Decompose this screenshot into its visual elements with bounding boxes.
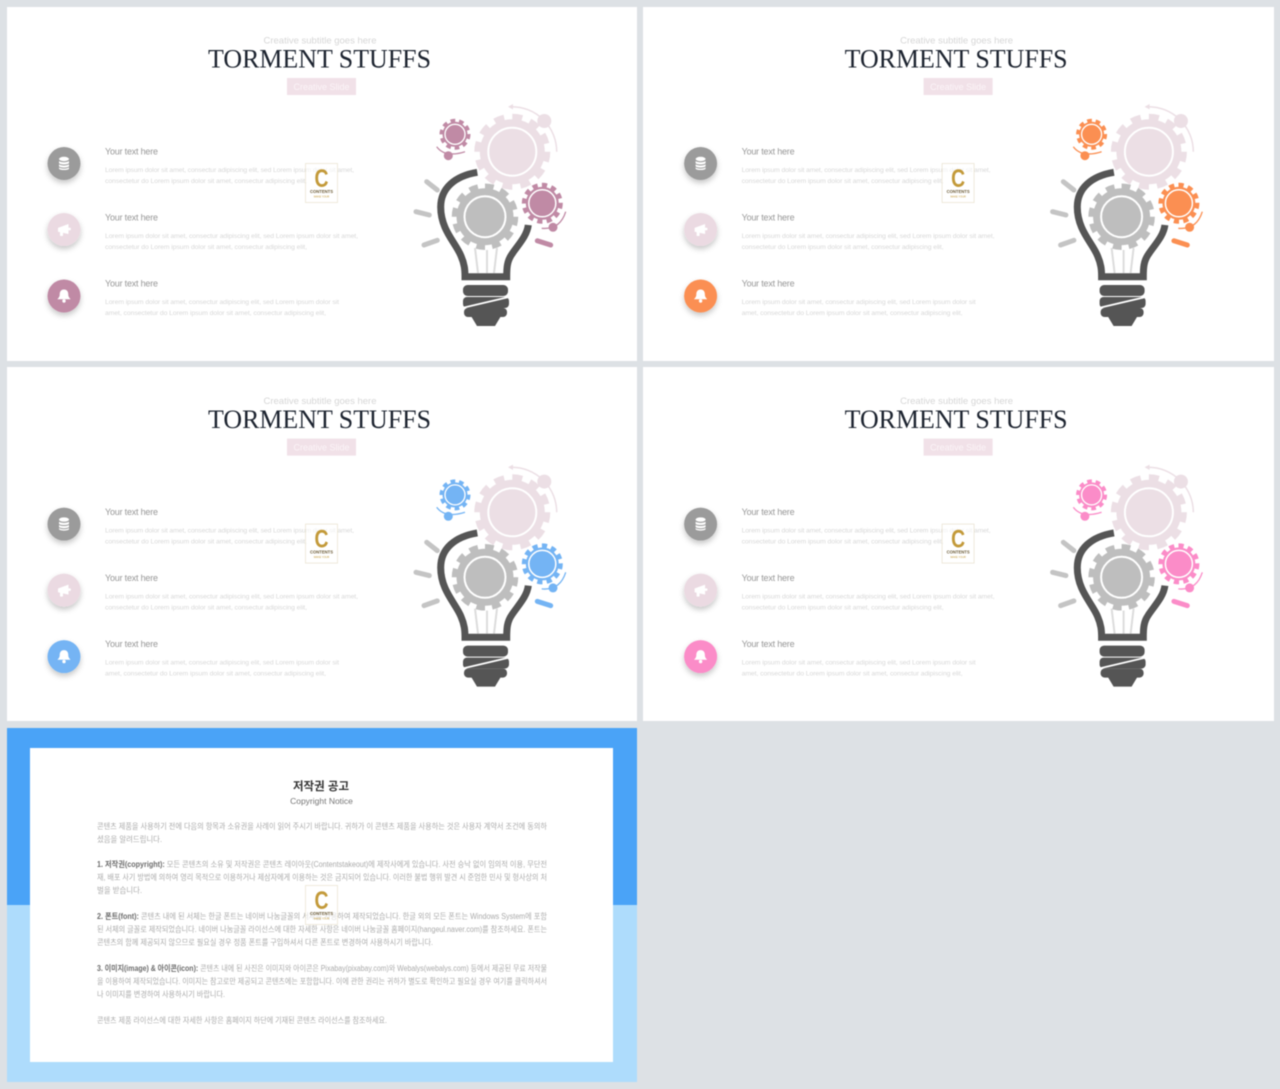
light blue lower band bbox=[7, 905, 637, 1082]
badge bbox=[287, 439, 356, 456]
title: TORMENT STUFFS bbox=[208, 44, 431, 74]
subtitle: Creative subtitle goes here bbox=[263, 396, 377, 407]
panel bbox=[643, 367, 1274, 721]
title: TORMENT STUFFS bbox=[845, 44, 1068, 74]
badge: Creative Slide bbox=[293, 82, 350, 92]
intro paragraph: 콘텐츠 제품을 사용하기 전에 다음의 항목과 소유권을 사례이 읽어 주시기 바랍니다. 귀하가 이 콘텐츠 제품을 사용하는 것은 사용자 계약서 조건에 동의하 bbox=[97, 821, 548, 831]
watermark bbox=[942, 164, 974, 202]
item 2: consectetur do Lorem ipsum dolor sit amet, consectur adipiscing elit, bbox=[742, 244, 944, 251]
subtitle: Creative subtitle goes here bbox=[900, 36, 1013, 46]
watermark: CONTENTS bbox=[947, 189, 970, 194]
item 1: Your text here bbox=[742, 146, 795, 156]
watermark: CONTENTS bbox=[310, 550, 333, 555]
badge: Creative Slide bbox=[930, 443, 986, 453]
item 3: Your text here bbox=[742, 278, 795, 288]
item 3 bbox=[684, 278, 976, 317]
item 1: consectetur do Lorem ipsum dolor sit amet, consectur adipiscing elit, bbox=[105, 178, 307, 185]
watermark: CONTENTS bbox=[310, 911, 333, 916]
item 1: Lorem ipsum dolor sit amet, consectur adipiscing elit, sed Lorem ipsum dolor sit amet, bbox=[742, 528, 991, 535]
slide 4: pink bbox=[643, 367, 1274, 721]
panel bbox=[7, 7, 637, 361]
item 3: Lorem ipsum dolor sit amet, consectur adipiscing elit, sed Lorem ipsum dolor sit bbox=[742, 660, 976, 667]
watermark: C bbox=[314, 526, 328, 554]
item 2: consectetur do Lorem ipsum dolor sit amet, consectur adipiscing elit, bbox=[742, 605, 944, 612]
item 1 bbox=[48, 507, 354, 546]
item 3: amet, consectetur do Lorem ipsum dolor sit amet, consectur adipiscing elit, bbox=[742, 671, 963, 678]
item 3: Lorem ipsum dolor sit amet, consectur adipiscing elit, sed Lorem ipsum dolor sit bbox=[742, 299, 976, 306]
item 1: Your text here bbox=[105, 507, 158, 517]
watermark: C bbox=[951, 526, 965, 554]
item 2: consectetur do Lorem ipsum dolor sit amet, consectur adipiscing elit, bbox=[105, 244, 307, 251]
item 3 bbox=[48, 639, 339, 678]
section 1 bbox=[97, 859, 547, 895]
item 2: Lorem ipsum dolor sit amet, consectur adipiscing elit, sed Lorem ipsum dolor sit amet, bbox=[105, 233, 358, 240]
title: TORMENT STUFFS bbox=[845, 405, 1068, 434]
bulb illustration bbox=[1053, 465, 1193, 687]
item 3 bbox=[48, 278, 339, 317]
watermark: MAKE YOUR bbox=[950, 555, 966, 559]
section 1: 벌을 받습니다. bbox=[97, 885, 142, 895]
item 3 bbox=[684, 639, 976, 678]
item 1 bbox=[684, 146, 991, 185]
item 1: consectetur do Lorem ipsum dolor sit amet, consectur adipiscing elit, bbox=[742, 178, 944, 185]
bulb illustration bbox=[416, 104, 557, 326]
watermark: C bbox=[314, 165, 328, 193]
subtitle: Creative subtitle goes here bbox=[263, 36, 377, 46]
bulb illustration bbox=[416, 465, 557, 687]
item 3: Your text here bbox=[105, 639, 158, 649]
item 3: Lorem ipsum dolor sit amet, consectur adipiscing elit, sed Lorem ipsum dolor sit bbox=[105, 299, 339, 306]
badge bbox=[924, 78, 993, 95]
accent gears bbox=[437, 481, 566, 606]
intro paragraph: 셨음을 알려드립니다. bbox=[97, 834, 162, 844]
slide 3: blue bbox=[7, 367, 637, 721]
notice subheading: Copyright Notice bbox=[290, 796, 353, 806]
title: TORMENT STUFFS bbox=[208, 405, 431, 434]
subtitle: Creative subtitle goes here bbox=[900, 396, 1013, 407]
panel bbox=[643, 7, 1274, 361]
bulb illustration bbox=[1053, 104, 1193, 326]
item 1: Your text here bbox=[742, 507, 795, 517]
item 2 bbox=[684, 212, 995, 251]
item 2 bbox=[684, 573, 995, 612]
item 2: Your text here bbox=[742, 212, 795, 222]
watermark: C bbox=[314, 887, 328, 915]
section 3: 을 이용하여 제작되었습니다. 이미지는 참고로만 제공되고 콘텐츠에는 포함합니다. 이에 관한 권리는 귀하가 별도로 확인하고 필요실 경우 여기를 클릭하셔서 bbox=[97, 976, 547, 986]
watermark: MAKE YOUR bbox=[314, 916, 329, 920]
accent gears bbox=[1073, 121, 1202, 245]
item 2: Your text here bbox=[105, 573, 158, 583]
watermark bbox=[306, 164, 338, 202]
section 3: 3. 이미지(image) & 아이콘(icon): 콘텐츠 내에 된 사진은 이미지와 아이콘은 Pixabay(pixabay.com)와 Webalys(webalys.com) 등에서 제공된 무료 저작물 bbox=[97, 963, 547, 973]
badge: Creative Slide bbox=[930, 82, 986, 92]
item 1: consectetur do Lorem ipsum dolor sit amet, consectur adipiscing elit, bbox=[742, 539, 944, 546]
item 3: amet, consectetur do Lorem ipsum dolor sit amet, consectur adipiscing elit, bbox=[742, 310, 963, 317]
item 3: Lorem ipsum dolor sit amet, consectur adipiscing elit, sed Lorem ipsum dolor sit bbox=[105, 660, 339, 667]
watermark bbox=[306, 524, 338, 563]
item 2: Lorem ipsum dolor sit amet, consectur adipiscing elit, sed Lorem ipsum dolor sit amet, bbox=[105, 594, 358, 601]
badge bbox=[924, 439, 993, 456]
item 1: Lorem ipsum dolor sit amet, consectur adipiscing elit, sed Lorem ipsum dolor sit amet, bbox=[742, 167, 991, 174]
item 2 bbox=[48, 212, 358, 251]
watermark bbox=[942, 524, 974, 563]
slide 2: orange bbox=[643, 7, 1274, 361]
item 1: Lorem ipsum dolor sit amet, consectur adipiscing elit, sed Lorem ipsum dolor sit amet, bbox=[105, 167, 354, 174]
accent gears bbox=[1073, 481, 1202, 606]
watermark: CONTENTS bbox=[310, 189, 333, 194]
slide 1: mauve bbox=[7, 7, 637, 361]
item 2: Lorem ipsum dolor sit amet, consectur adipiscing elit, sed Lorem ipsum dolor sit amet, bbox=[742, 233, 995, 240]
section 3 bbox=[97, 963, 547, 999]
watermark: C bbox=[951, 165, 965, 193]
badge bbox=[287, 78, 356, 95]
item 3: Your text here bbox=[105, 278, 158, 288]
notice heading: 저작권 공고 bbox=[293, 779, 349, 793]
panel bbox=[7, 367, 637, 721]
item 1 bbox=[48, 146, 354, 185]
closing line: 콘텐츠 제품 라이선스에 대한 자세한 사항은 홈페이지 하단에 기재된 콘텐츠 라이선스를 참조하세요. bbox=[97, 1015, 387, 1025]
item 3: Your text here bbox=[742, 639, 795, 649]
watermark: MAKE YOUR bbox=[314, 555, 329, 559]
section 1: 재, 배포 사기 방법에 의하여 영리 목적으로 이용하거나 제삼자에게 이용하는 것은 금지되어 있습니다. 이러한 불법 행위 발견 시 준엄한 민사 및 형사상의 처 bbox=[97, 872, 547, 882]
item 1: consectetur do Lorem ipsum dolor sit amet, consectur adipiscing elit, bbox=[105, 539, 307, 546]
section 2: 콘텐츠의 함께 제공되지 않으므로 필요실 경우 정품 폰트를 구입하셔서 다른 폰트로 변경하여 사용하시기 바랍니다. bbox=[97, 937, 433, 947]
intro paragraph bbox=[97, 821, 548, 844]
watermark: MAKE YOUR bbox=[314, 194, 329, 198]
section 1: 1. 저작권(copyright): 모든 콘텐츠의 소유 및 저작권은 콘텐츠 레이아웃(Contentstakeout)에 제작사에게 있습니다. 사전 승낙 없이 임의적 이용, 무단전 bbox=[97, 859, 547, 869]
item 2 bbox=[48, 573, 358, 612]
copyright slide bbox=[7, 728, 637, 1082]
badge: Creative Slide bbox=[293, 443, 350, 453]
item 2: consectetur do Lorem ipsum dolor sit amet, consectur adipiscing elit, bbox=[105, 605, 307, 612]
item 3: amet, consectetur do Lorem ipsum dolor sit amet, consectur adipiscing elit, bbox=[105, 671, 326, 678]
accent gears bbox=[437, 121, 566, 245]
section 3: 나 이미지를 변경하여 사용하시기 바랍니다. bbox=[97, 989, 225, 999]
item 1 bbox=[684, 507, 991, 546]
section 2: 된 서체의 글꼴로 제작되었습니다. 네이버 나눔글꼴 라이선스에 대한 자세한 사항은 네이버 나눔글꼴 홈페이지(hangeul.naver.com)를 참조하세요. 폰트는 bbox=[97, 924, 547, 934]
section 2: 2. 폰트(font): 콘텐츠 내에 된 서체는 한글 폰트는 네이버 나눔글꼴의 서체를 사용하여 제작되었습니다. 한글 외의 모든 폰트는 Windows System에 포함 bbox=[97, 911, 548, 921]
section 2 bbox=[97, 911, 548, 947]
item 2: Your text here bbox=[105, 212, 158, 222]
item 2: Lorem ipsum dolor sit amet, consectur adipiscing elit, sed Lorem ipsum dolor sit amet, bbox=[742, 594, 995, 601]
white notice card bbox=[30, 748, 613, 1062]
item 1: Your text here bbox=[105, 146, 158, 156]
watermark: CONTENTS bbox=[947, 550, 970, 555]
watermark bbox=[306, 886, 338, 924]
item 1: Lorem ipsum dolor sit amet, consectur adipiscing elit, sed Lorem ipsum dolor sit amet, bbox=[105, 528, 354, 535]
watermark: MAKE YOUR bbox=[950, 194, 966, 198]
blue upper band bbox=[7, 728, 637, 905]
item 3: amet, consectetur do Lorem ipsum dolor sit amet, consectur adipiscing elit, bbox=[105, 310, 326, 317]
item 2: Your text here bbox=[742, 573, 795, 583]
